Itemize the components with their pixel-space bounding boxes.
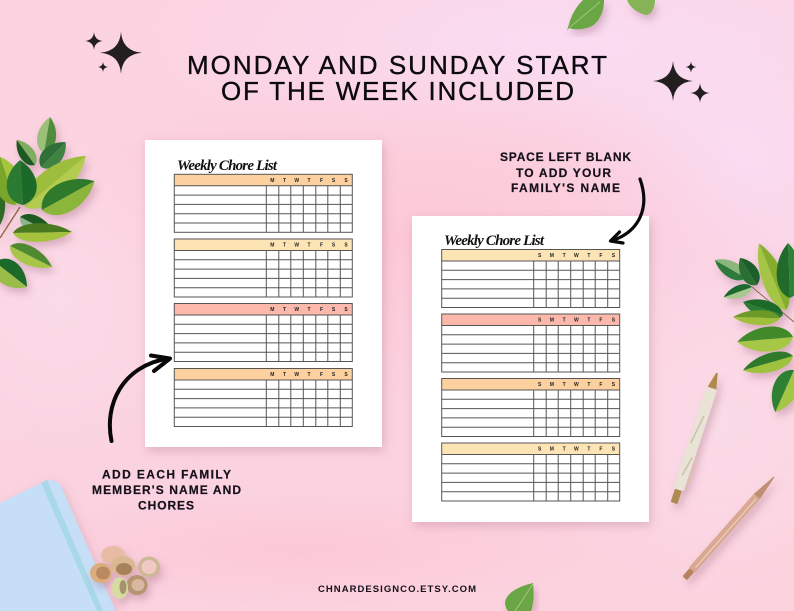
chore table 4: T — [307, 372, 311, 378]
chore table 2: F — [599, 318, 602, 324]
chore table 3: M — [270, 307, 274, 313]
chore table 3: F — [599, 382, 602, 388]
icon: sparkles top right — [653, 61, 710, 103]
handwritten page heading: Weekly Chore List — [177, 158, 278, 174]
chore table 2: W — [574, 318, 579, 324]
chore table 1: F — [320, 178, 323, 184]
callout: space left blank: SPACE LEFT BLANK — [500, 150, 631, 164]
chore table 4: T — [563, 447, 566, 453]
chore table 2: M — [270, 243, 274, 249]
chore table 3 — [442, 378, 620, 436]
chore table 2: T — [587, 318, 590, 324]
callout: add each family member: CHORES — [138, 498, 194, 512]
chore table 2: T — [307, 243, 311, 249]
chore table 1: F — [599, 253, 602, 259]
title: OF THE WEEK INCLUDED — [221, 76, 574, 106]
callout: add each family member: MEMBER'S NAME AND — [92, 483, 241, 497]
chore table 3: S — [332, 307, 336, 313]
chore table 3: W — [574, 382, 579, 388]
chore table 1: T — [587, 253, 590, 259]
chore table 2: S — [332, 243, 336, 249]
icon: washi tape rolls — [90, 546, 160, 599]
title — [187, 50, 607, 106]
chore table 2: S — [538, 318, 542, 324]
chore table 4: M — [270, 372, 274, 378]
chore table 3 — [174, 304, 352, 362]
chore table 1: M — [550, 253, 554, 259]
icon: blue notebook — [0, 480, 116, 611]
chore table 2: T — [563, 318, 566, 324]
chore table 1: S — [612, 253, 616, 259]
callout: space left blank — [500, 150, 631, 195]
chore table 2: S — [612, 318, 616, 324]
chore table 4: M — [550, 447, 554, 453]
chore table 4 — [174, 368, 352, 426]
chore table 4: S — [612, 447, 616, 453]
chore table 1: T — [307, 178, 311, 184]
icon: sparkles top left — [85, 32, 142, 74]
chore table 1 — [442, 250, 620, 308]
icon: white marble pen — [669, 371, 724, 505]
chore table 3: T — [307, 307, 311, 313]
chore table 3: S — [538, 382, 542, 388]
chore table 3: S — [612, 382, 616, 388]
chore table 3: F — [320, 307, 323, 313]
chore table 1 — [174, 174, 352, 232]
callout: add each family member — [92, 468, 241, 512]
callout: space left blank: FAMILY'S NAME — [511, 181, 620, 195]
chore table 4: W — [294, 372, 299, 378]
chore table 2: W — [294, 243, 299, 249]
chore table 1: T — [283, 178, 286, 184]
chore table 1: S — [344, 178, 348, 184]
chore table 3: T — [563, 382, 566, 388]
chore table 4: F — [320, 372, 323, 378]
chore table 4: T — [283, 372, 286, 378]
chore table 4: S — [538, 447, 542, 453]
leaves: top edge — [567, 0, 655, 31]
chore table 3: T — [283, 307, 286, 313]
chore table 4: T — [587, 447, 590, 453]
panel: right planner page, Sunday start — [412, 216, 649, 522]
callout: space left blank: TO ADD YOUR — [516, 166, 611, 180]
chore table 2: M — [550, 318, 554, 324]
chore table 3: T — [587, 382, 590, 388]
leaves: right branch — [711, 239, 794, 417]
chore table 4: S — [332, 372, 336, 378]
chore table 1: S — [332, 178, 336, 184]
chore table 3: M — [550, 382, 554, 388]
chore table 1: M — [270, 178, 274, 184]
arrow: to left page rows — [110, 356, 170, 441]
chore table 1: W — [294, 178, 299, 184]
chore table 4 — [442, 443, 620, 501]
icon: rose gold pen — [682, 474, 777, 581]
callout: add each family member: ADD EACH FAMILY — [102, 468, 231, 482]
chore table 1: S — [538, 253, 542, 259]
chore table 2: S — [344, 243, 348, 249]
chore table 2: T — [283, 243, 286, 249]
chore table 4: W — [574, 447, 579, 453]
chore table 3: S — [344, 307, 348, 313]
chore table 4: F — [599, 447, 602, 453]
chore table 2: F — [320, 243, 323, 249]
panel: left planner page, Monday start — [145, 140, 382, 447]
chore table 1: T — [563, 253, 566, 259]
chore table 4: S — [344, 372, 348, 378]
title: MONDAY AND SUNDAY START — [187, 50, 607, 80]
arrow: to right page heading — [610, 179, 644, 243]
chore table 1: W — [574, 253, 579, 259]
chore table 2 — [174, 239, 352, 297]
footer: shop URL: CHNARDESIGNCO.ETSY.COM — [318, 584, 476, 595]
chore table 3: W — [294, 307, 299, 313]
chore table 2 — [442, 314, 620, 372]
leaves: left branch — [0, 115, 102, 297]
handwritten page heading: Weekly Chore List — [444, 233, 545, 249]
leaf: bottom edge — [505, 583, 534, 611]
